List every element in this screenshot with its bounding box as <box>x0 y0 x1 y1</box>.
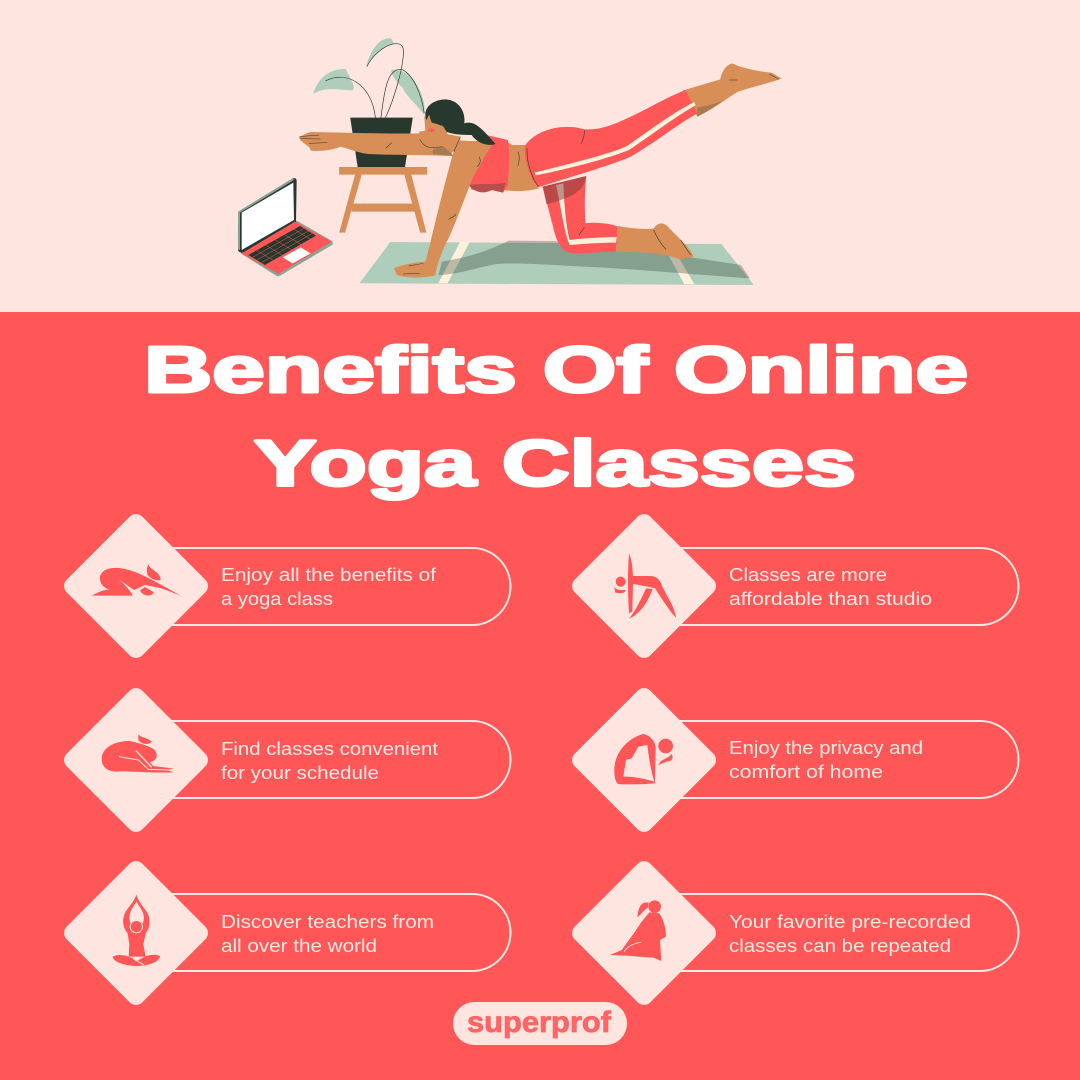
panel: benefit 6 <box>568 857 1018 1009</box>
sports top <box>469 135 509 193</box>
diamond <box>568 684 720 836</box>
icon: lotus pose <box>113 894 160 966</box>
neck <box>442 133 460 153</box>
text: Your favorite pre-recorded <box>729 911 971 932</box>
title: Yoga Classes <box>254 426 856 500</box>
ear <box>437 125 445 135</box>
pill outline <box>120 721 510 798</box>
text: Classes are more <box>729 564 887 585</box>
diamond <box>60 857 212 1009</box>
text <box>729 737 923 782</box>
logo: superprof: superprof <box>467 1006 612 1039</box>
text <box>221 738 438 783</box>
panel: benefit 4 <box>568 684 1018 836</box>
supporting thigh legging <box>543 176 618 253</box>
panel: benefit 5 <box>60 857 511 1009</box>
text <box>729 911 971 956</box>
icon: seated twist pose <box>610 900 666 961</box>
text: Enjoy the privacy and <box>729 737 923 758</box>
text: Discover teachers from <box>221 911 434 932</box>
face <box>419 117 448 149</box>
icon: seated forward bend <box>102 734 174 773</box>
diamond <box>568 510 720 662</box>
plant pot <box>350 118 413 167</box>
text: Find classes convenient <box>221 738 438 759</box>
illustration: yoga scene <box>299 38 782 285</box>
diamond <box>60 510 212 662</box>
diamond <box>60 684 212 836</box>
text: affordable than studio <box>729 588 932 609</box>
text <box>221 564 437 609</box>
title: Benefits Of Online <box>144 333 968 406</box>
panel: top illustration band <box>0 0 1080 312</box>
neck shadow <box>433 144 453 156</box>
raised leg skin <box>682 63 782 117</box>
panel: benefit 3 <box>60 684 511 836</box>
torso skin <box>457 140 539 191</box>
icon: bridge pose <box>614 734 673 784</box>
supporting arm <box>394 140 478 277</box>
outstretched arm <box>299 132 452 156</box>
panel: benefit 2 <box>568 510 1018 662</box>
body detail lines <box>300 74 779 274</box>
wooden stool <box>339 167 427 233</box>
logo: superprof <box>453 1002 627 1045</box>
text: a yoga class <box>221 588 333 609</box>
raised leg legging <box>525 90 697 187</box>
supporting calf and foot <box>616 223 694 259</box>
text: Enjoy all the benefits of <box>221 564 437 585</box>
hair <box>425 99 496 145</box>
panel: benefit 1 <box>60 510 511 662</box>
diamond <box>568 857 720 1009</box>
text: all over the world <box>221 935 377 956</box>
pill outline <box>628 894 1018 971</box>
icon: child's pose <box>92 564 181 596</box>
text: classes can be repeated <box>729 935 951 956</box>
text <box>221 911 434 956</box>
yoga mat <box>359 241 754 285</box>
text <box>729 564 932 609</box>
icon: triangle pose <box>614 553 676 619</box>
text: for your schedule <box>221 762 379 783</box>
pill outline <box>120 548 510 625</box>
text: comfort of home <box>729 761 883 782</box>
illustration: woman doing yoga with plant and laptop <box>238 38 782 285</box>
pill outline <box>120 894 510 971</box>
pill outline <box>628 548 1018 625</box>
title <box>144 333 968 500</box>
illustration: laptop <box>238 178 333 276</box>
plant leaves and stems <box>313 38 425 118</box>
pill outline <box>628 721 1018 798</box>
